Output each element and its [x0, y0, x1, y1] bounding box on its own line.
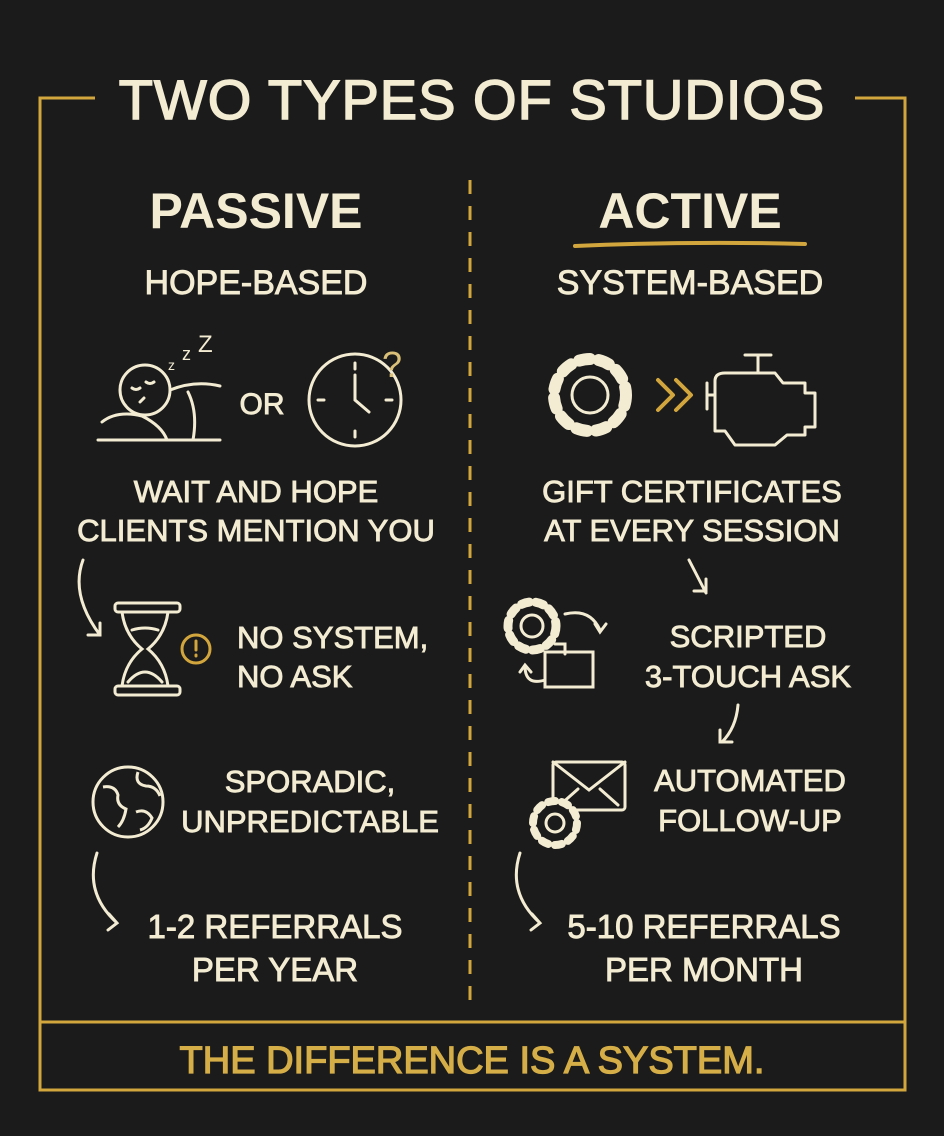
text: wait and hope: CLIENTS MENTION YOU	[77, 513, 435, 548]
icon: globe	[92, 766, 164, 838]
subheading: system-based: SYSTEM-BASED	[557, 264, 823, 302]
arrow: left 1	[78, 558, 102, 637]
text: scripted: 3-TOUCH ASK	[645, 659, 851, 694]
icon: sleeping person: Z	[198, 331, 213, 358]
arrow: right 1	[687, 558, 708, 595]
text: 1-2 referrals	[148, 908, 402, 988]
text: no system	[237, 620, 428, 694]
heading: active: ACTIVE	[598, 183, 782, 239]
arrow: left 2	[92, 852, 120, 932]
text: no system: NO SYSTEM,	[237, 620, 428, 655]
text: no system: NO ASK	[237, 659, 352, 694]
text: 5-10 referrals	[567, 908, 841, 988]
text: 5-10 referrals: 5-10 REFERRALS	[567, 908, 841, 945]
text: sporadic: UNPREDICTABLE	[181, 804, 439, 839]
icon: gear to engine	[548, 353, 816, 446]
icon: clock	[308, 344, 402, 448]
text: sporadic: SPORADIC,	[225, 764, 395, 799]
text: gift certificates: GIFT CERTIFICATES	[542, 474, 842, 509]
title: TWO TYPES OF STUDIOS	[119, 68, 825, 131]
text: wait and hope	[77, 474, 435, 548]
text: automated	[654, 763, 846, 838]
text: 1-2 referrals: 1-2 REFERRALS	[148, 908, 402, 945]
text: scripted	[645, 619, 852, 694]
text: wait and hope: WAIT AND HOPE	[134, 474, 378, 509]
subheading: hope-based: HOPE-BASED	[145, 264, 367, 302]
icon: sleeping person: z	[182, 344, 191, 364]
icon: sleeping person	[96, 331, 222, 442]
arrow: right 3	[514, 852, 542, 932]
icon: hourglass	[114, 602, 212, 696]
arrow: right 2	[718, 704, 740, 744]
text: automated: FOLLOW-UP	[658, 803, 842, 838]
underline: active	[573, 240, 807, 248]
text: or: OR	[240, 388, 284, 421]
text: scripted: SCRIPTED	[670, 619, 826, 654]
icon: envelope and gear	[529, 760, 627, 849]
icon: sleeping person: z	[168, 357, 175, 373]
text: gift certificates	[542, 474, 842, 548]
text: 1-2 referrals: PER YEAR	[192, 951, 358, 988]
footer: THE DIFFERENCE IS A SYSTEM.	[180, 1040, 764, 1082]
text: automated: AUTOMATED	[654, 763, 846, 798]
heading: passive: PASSIVE	[149, 183, 363, 239]
text: 5-10 referrals: PER MONTH	[605, 951, 803, 988]
icon: clock: ?	[382, 344, 402, 385]
text: gift certificates: AT EVERY SESSION	[544, 513, 840, 548]
text: sporadic	[181, 764, 439, 839]
icon: gears and documents	[504, 598, 608, 688]
